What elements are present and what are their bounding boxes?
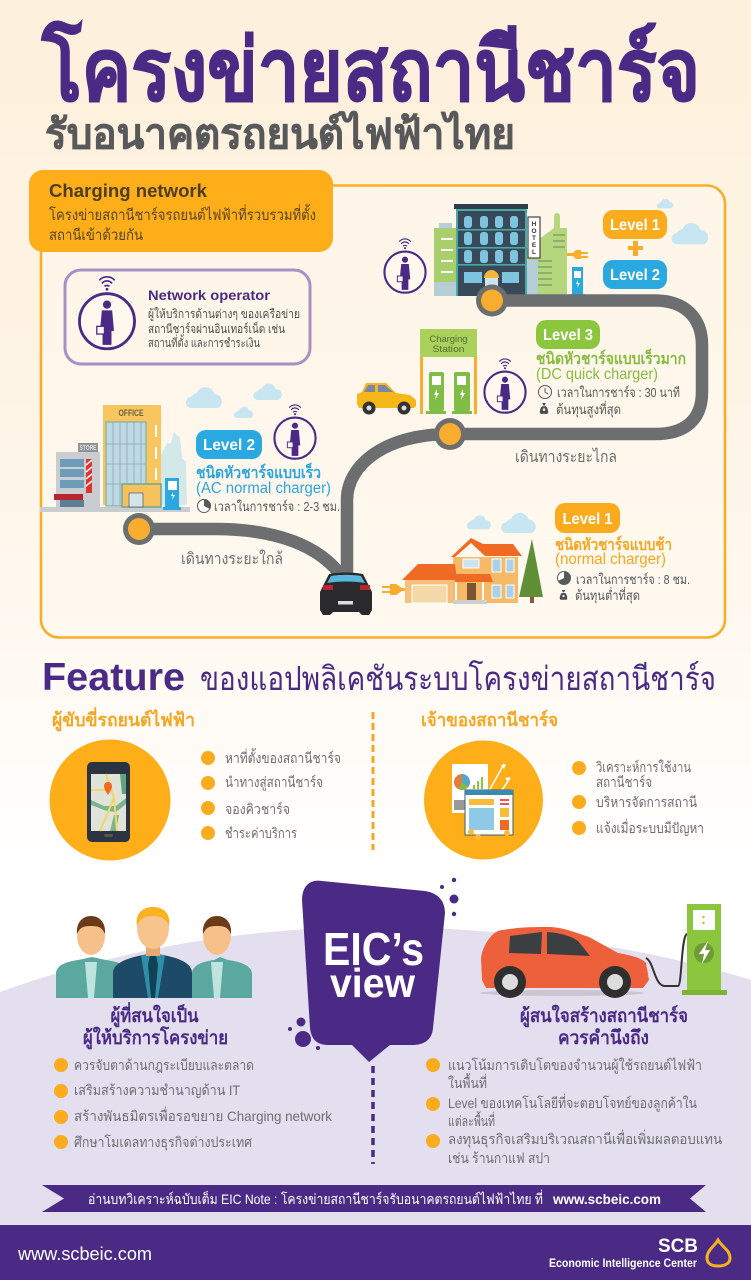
icon: black car (320, 572, 372, 615)
icon: charging station: Charging (430, 334, 468, 345)
callout: charging network definition (29, 170, 333, 252)
icon: hotel and city: L (532, 249, 536, 256)
panel: network provider advice: ควรจับตาด้านกฎระเบียบและตลาด (74, 1057, 254, 1073)
text: level 3 block: Level 3 (543, 327, 593, 344)
tag: level 1 top (603, 210, 667, 239)
text: level 1 block: (normal charger) (555, 551, 666, 568)
icon: tree (519, 539, 543, 603)
feature list: drivers: จองคิวชาร์จ (225, 801, 290, 817)
banner: read more: www.scbeic.com (552, 1191, 661, 1207)
text: level 3 block: ชนิดหัวชาร์จแบบเร็วมาก (536, 347, 686, 368)
icon: charging station (420, 329, 477, 414)
icon: office and store: OFFICE (118, 408, 144, 418)
panel: EV drivers: ผู้ขับขี่รถยนต์ไฟฟ้า (52, 707, 195, 732)
panel: EV drivers (50, 707, 341, 860)
panel: station builder advice: แต่ละพื้นที่ (448, 1111, 495, 1129)
icon: hotel and city: E (532, 242, 537, 249)
panel: network operator: สถานที่ตั้ง และการชำระเงิน (148, 334, 260, 350)
icon: red car at charger (480, 927, 687, 998)
footer: www.scbeic.com (17, 1244, 152, 1264)
panel: station builder advice: แนวโน้มการเติบโตของจำนวนผู้ใช้รถยนต์ไฟฟ้า (448, 1057, 702, 1074)
panel: network operator: ผู้ให้บริการด้านต่างๆ ของเครือข่าย (148, 307, 300, 322)
label: short distance: เดินทางระยะใกล้ (181, 549, 283, 568)
road node: office (123, 513, 155, 545)
icon: phone with map (87, 762, 130, 842)
icon: station operator (484, 359, 526, 413)
small cloud (657, 199, 673, 208)
panel: station owners: เจ้าของสถานีชาร์จ (421, 709, 558, 730)
icon: hotel and city: O (531, 228, 537, 235)
lilac hill background (0, 927, 751, 1225)
divider (372, 712, 374, 850)
text: level 3 block: (DC quick charger) (536, 366, 658, 383)
panel: station builder advice: ผู้สนใจสร้างสถานีชาร์จ (520, 1004, 688, 1028)
panel: network provider advice (54, 1002, 333, 1151)
panel: station builder advice: ในพื้นที่ (448, 1073, 487, 1091)
clouds above office (186, 384, 282, 418)
center dashed line (371, 1066, 375, 1164)
icon: green charger (682, 904, 727, 995)
clouds near level tags (672, 223, 708, 244)
panel: network provider advice: ผู้ที่สนใจเป็น (110, 1002, 199, 1028)
EIC view speech bubble (302, 881, 445, 1062)
text: level 1 block: เวลาในการชาร์จ : 8 ชม. (576, 572, 690, 587)
panel: station owners (421, 709, 704, 860)
text: level 1 block: ชนิดหัวชาร์จแบบช้า (555, 535, 672, 554)
panel: station builder advice: เช่น ร้านกาแฟ สปา (448, 1150, 550, 1166)
icon: hotel and city (434, 204, 588, 297)
feature list: drivers: หาที่ตั้งของสถานีชาร์จ (225, 748, 341, 766)
icon: SCB logo (707, 1240, 730, 1266)
footer: SCB (658, 1236, 698, 1257)
bubble dots (288, 878, 458, 1050)
text: level 3 block (536, 320, 686, 418)
text: level 2 block: เวลาในการชาร์จ : 2-3 ชม. (214, 499, 340, 514)
feature list: owners: แจ้งเมื่อระบบมีปัญหา (596, 819, 704, 836)
panel: network operator (65, 270, 310, 364)
clouds above house (467, 513, 536, 533)
text: level 2 block: Level 2 (203, 437, 255, 454)
icon: analytics report (452, 764, 513, 840)
icon: office and store (40, 405, 190, 512)
road node: station (434, 418, 466, 450)
tag: level 1 top: Level 1 (610, 217, 660, 234)
icon: hotel operator (384, 239, 426, 293)
tag: level 2 top (603, 260, 667, 289)
icon: charging station: Station (432, 344, 464, 355)
panel: station builder advice: ลงทุนธุรกิจเสริมบริเวณสถานีเพื่อเพิ่มผลตอบแทน (448, 1130, 722, 1148)
footer: Economic Intelligence Center (549, 1256, 697, 1270)
panel: station builder advice (426, 1004, 722, 1166)
panel: network provider advice: ผู้ให้บริการโครงข่าย (83, 1026, 228, 1050)
banner: read more (42, 1185, 706, 1212)
footer (0, 1225, 751, 1280)
feature list: owners (572, 759, 704, 836)
icon: office and store: STORE (80, 445, 97, 452)
text: level 2 block: ชนิดหัวชาร์จแบบเร็ว (196, 461, 321, 482)
icon: plus (628, 241, 643, 256)
icon: plug (382, 584, 407, 595)
heading: feature (42, 656, 716, 699)
panel: network provider advice: ศึกษาโมเดลทางธุรกิจต่างประเทศ (74, 1134, 252, 1151)
icon: hotel and city: H (532, 221, 537, 228)
EIC view speech bubble: EIC’s (323, 923, 424, 975)
feature list: drivers: ชำระค่าบริการ (225, 825, 297, 841)
panel: network provider advice: เสริมสร้างความชำนาญด้าน IT (74, 1082, 240, 1098)
feature list: drivers: นำทางสู่สถานีชาร์จ (225, 774, 323, 791)
feature list: owners: บริหารจัดการสถานี (596, 794, 697, 810)
EIC view speech bubble: view (330, 960, 415, 1006)
callout: charging network definition: Charging network (49, 181, 208, 201)
panel: station builder advice: Level ของเทคโนโลยีที่จะตอบโจทย์ของลูกค้าใน (448, 1094, 697, 1112)
text: level 2 block (196, 430, 340, 514)
icon: hotel and city: T (532, 235, 536, 242)
panel: network provider advice: สร้างพันธมิตรเพื่อรอขยาย Charging network (74, 1107, 333, 1124)
heading: feature: Feature (42, 656, 185, 699)
road network (139, 300, 702, 580)
feature list: owners: สถานีชาร์จ (596, 774, 652, 790)
road node: hotel (476, 284, 508, 316)
text: level 1 block (555, 503, 690, 604)
panel: network operator: สถานีชาร์จผ่านอินเทอร์เน็ต เช่น (148, 321, 285, 336)
panel: charging network map (29, 170, 725, 638)
label: long distance: เดินทางระยะไกล (515, 447, 617, 466)
panel: station builder advice: ควรคำนึงถึง (558, 1027, 649, 1049)
icon: yellow car (357, 383, 416, 414)
feature list: owners: วิเคราะห์การใช้งาน (596, 759, 691, 775)
map frame (41, 186, 725, 638)
feature list: drivers (201, 748, 341, 841)
tag: level 2 top: Level 2 (610, 267, 660, 284)
callout: charging network definition: สถานีเข้าด้วยกัน (49, 227, 143, 244)
panel: network operator: Network operator (148, 287, 271, 303)
text: level 3 block: เวลาในการชาร์จ : 30 นาที (557, 385, 680, 400)
callout: charging network definition: โครงข่ายสถานีชาร์จรถยนต์ไฟฟ้าที่รวบรวมที่ตั้ง (49, 204, 316, 224)
text: level 1 block: Level 1 (562, 511, 613, 528)
icon: house (402, 538, 522, 604)
text: level 3 block: ต้นทุนสูงที่สุด (556, 401, 621, 418)
text: level 1 block: ต้นทุนต่ำที่สุด (575, 587, 640, 604)
subtitle: รับอนาคตรถยนต์ไฟฟ้าไทย (45, 110, 515, 157)
banner: read more: อ่านบทวิเคราะห์ฉบับเต็ม EIC Note : โครงข่ายสถานีชาร์จรับอนาคตรถยนต์ไฟฟ้าไทย ที่ (88, 1190, 543, 1207)
icon: office operator (274, 405, 316, 459)
text: level 2 block: (AC normal charger) (196, 480, 331, 497)
icon: people group (56, 907, 252, 998)
